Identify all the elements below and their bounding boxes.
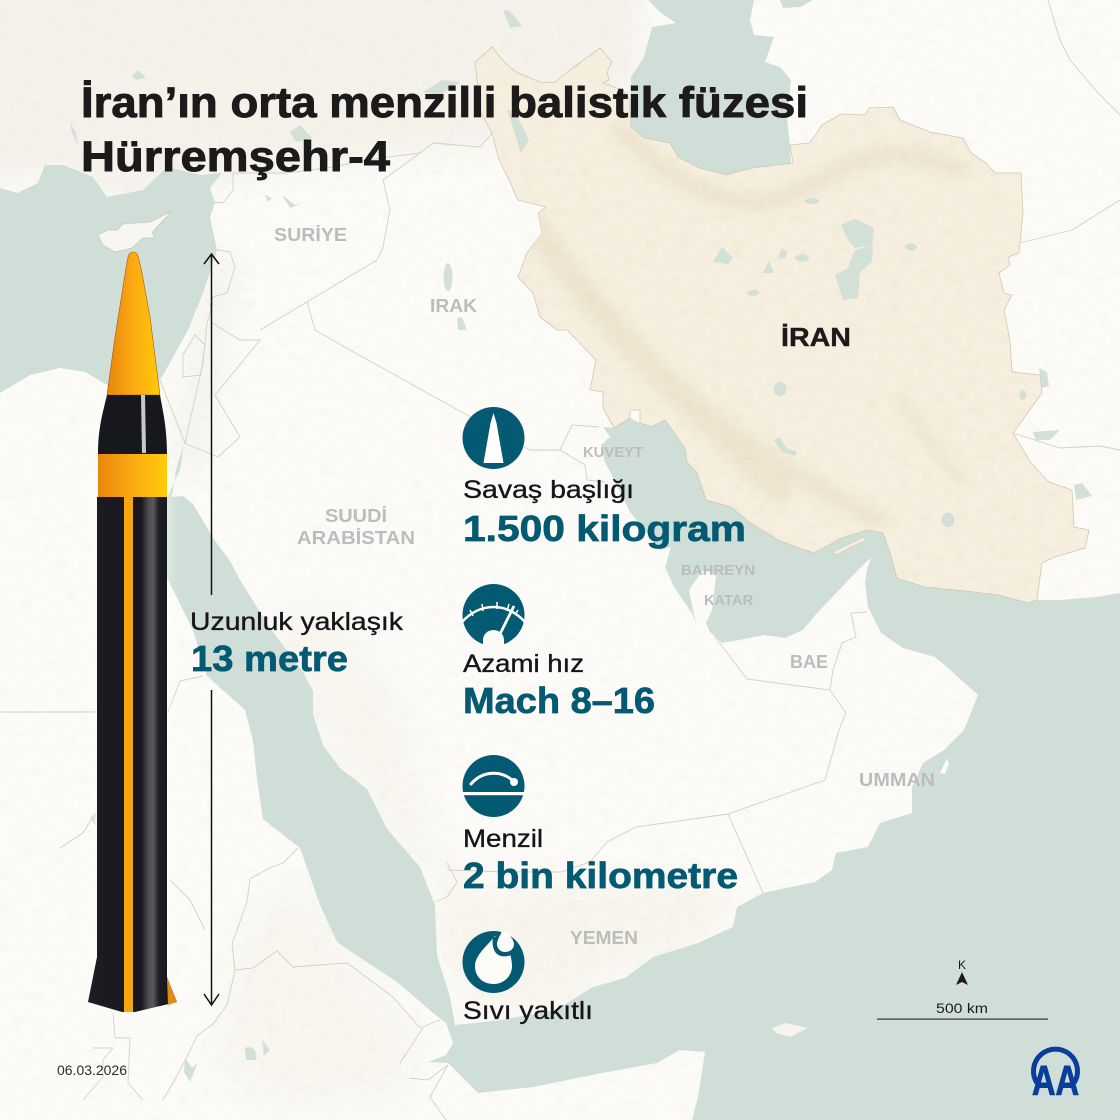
stat: top speed: Azami hız [463, 650, 584, 678]
missile halo [97, 395, 168, 960]
logo: AA [1032, 1049, 1079, 1104]
missile yellow band [98, 454, 167, 497]
sea: Aral fragment [780, 0, 813, 8]
title: İran’ın orta menzilli balistik füzesi [81, 79, 808, 127]
date: 06.03.2026 [57, 1063, 127, 1078]
length label [190, 608, 404, 679]
country labels: KATAR [704, 593, 754, 609]
country labels: BAE [790, 652, 828, 672]
length label: 13 metre [191, 638, 348, 679]
island: Cyprus [98, 211, 172, 252]
country labels: SURİYE [274, 225, 347, 245]
country: Iran [470, 40, 1100, 610]
stat: liquid fuel: Sıvı yakıtlı [463, 997, 593, 1025]
title: Hürremşehr-4 [81, 133, 390, 181]
sea: Arabian Sea, Gulf, Red Sea [140, 418, 1120, 1120]
sea: Caspian [631, 0, 791, 175]
sea: Mediterranean [0, 165, 222, 400]
stat: warhead: Savaş başlığı [463, 476, 634, 504]
country labels: UMMAN [859, 770, 935, 790]
missile upper highlight [141, 395, 146, 453]
north arrow: K [958, 958, 966, 972]
missile body [88, 497, 177, 1012]
island: Masirah [940, 758, 949, 774]
stat: range: Menzil [463, 825, 543, 853]
icon: liquid fuel [462, 931, 524, 993]
icon: warhead [462, 407, 524, 469]
country labels: YEMEN [570, 928, 638, 948]
missile upper black section [98, 395, 167, 454]
length arrows [204, 254, 219, 1005]
country labels: İRAN [781, 322, 851, 352]
country labels: IRAK [430, 296, 477, 316]
icon: speed gauge [462, 584, 525, 646]
stat: warhead: 1.500 kilogram [463, 508, 746, 549]
country labels: SUUDİ [325, 506, 387, 526]
length label: Uzunluk yaklaşık [190, 608, 404, 636]
missile nose cone [107, 252, 160, 395]
icon: range [462, 755, 525, 817]
title [81, 79, 808, 181]
country labels: KUVEYT [583, 445, 643, 461]
missile fin [167, 977, 177, 1005]
missile illustration [88, 252, 177, 1012]
north arrow [956, 958, 968, 985]
logo: AA: AA [1032, 1057, 1079, 1104]
country labels [274, 225, 935, 948]
missile yellow stripe [124, 497, 133, 1012]
terrain shading [0, 0, 740, 1110]
stat: range: 2 bin kilometre [463, 855, 738, 896]
stat: warhead [463, 476, 746, 549]
island: Socotra [772, 1023, 808, 1037]
stat: top speed: Mach 8–16 [463, 680, 655, 721]
country labels: ARABİSTAN [297, 528, 415, 548]
scale bar: 500 km [936, 1001, 988, 1016]
country labels: BAHREYN [681, 563, 755, 579]
stat: top speed [463, 650, 655, 721]
stat: range [463, 825, 738, 896]
